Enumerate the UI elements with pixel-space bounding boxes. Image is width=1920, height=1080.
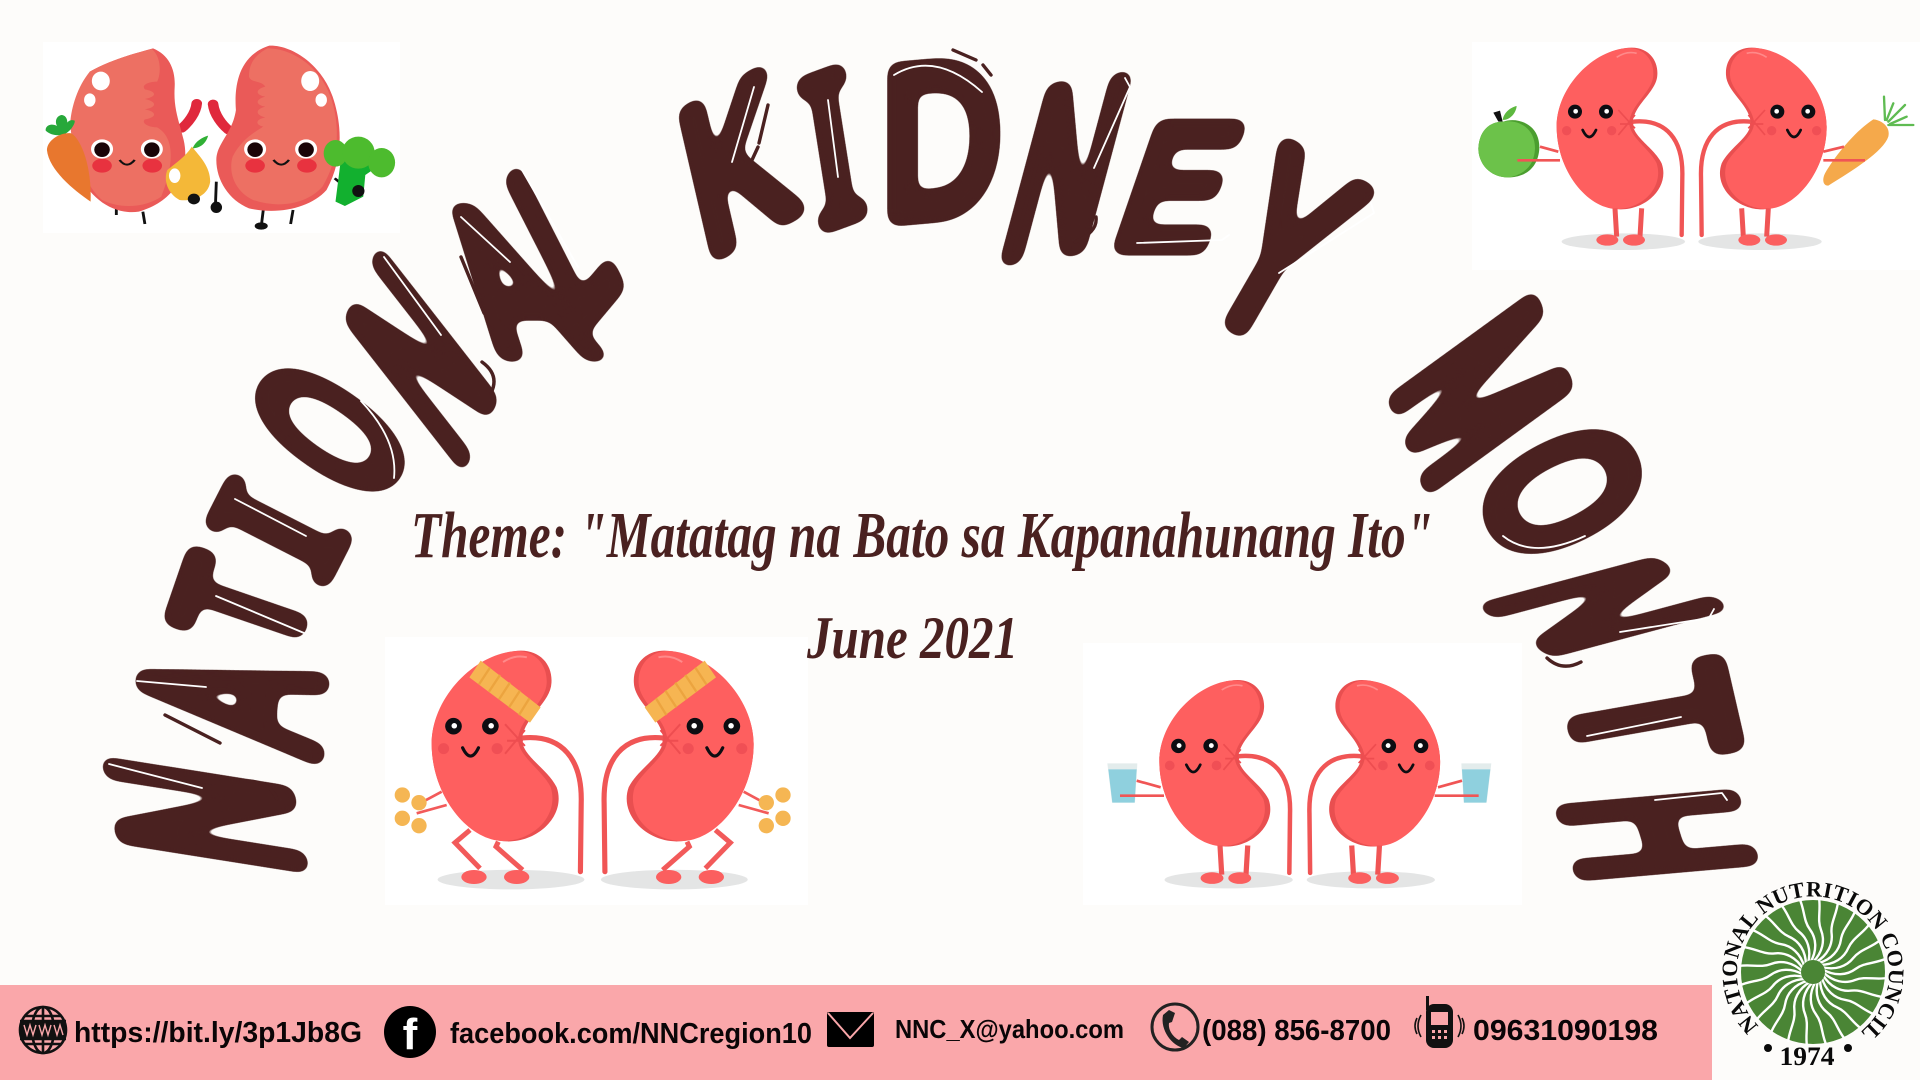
word: NATIONAL: T: [137, 538, 346, 674]
illustration: kidneys holding vegetables (top left): [43, 42, 400, 233]
word: KIDNEY: [664, 17, 1399, 399]
icon: telephone: [1152, 1004, 1198, 1050]
icon: facebook: [384, 1006, 436, 1059]
facebook address: facebook.com/NNCregion10: [450, 1018, 812, 1050]
email address: NNC_X@yahoo.com: [895, 1014, 1124, 1044]
word: NATIONAL: A: [391, 168, 626, 398]
icon: water glass (left): [1107, 763, 1164, 803]
icon: globe: [20, 1007, 66, 1053]
word: KIDNEY: Y: [1164, 96, 1399, 399]
logo: National Nutrition Council seal: 1974: [1780, 1042, 1834, 1071]
landline number: (088) 856-8700: [1202, 1015, 1391, 1047]
icon: carrot: [1823, 97, 1913, 186]
logo: National Nutrition Council seal: NATIONAL NUTRITION COUNCIL: [1722, 882, 1904, 1038]
website url: https://bit.ly/3p1Jb8G: [74, 1017, 362, 1049]
icon: apple: [1478, 106, 1560, 177]
word: MONTH: N: [1428, 542, 1780, 672]
title highlights and accent dashes: [109, 50, 1727, 800]
illustration: kidneys holding apple and carrot (top right): [1472, 42, 1920, 270]
word: KIDNEY: I: [790, 21, 874, 274]
word: KIDNEY: N: [982, 28, 1150, 310]
word: NATIONAL: I: [171, 455, 385, 604]
icon: water glass (right): [1435, 763, 1491, 803]
word: NATIONAL: N: [314, 204, 529, 515]
title: National Kidney Month arched lettering: [55, 17, 1804, 889]
word: KIDNEY: E: [1096, 91, 1260, 284]
icon: broccoli: [324, 137, 395, 206]
word: KIDNEY: D: [881, 17, 1001, 264]
icon: facebook: f: [403, 1010, 418, 1059]
word: MONTH: [1350, 259, 1804, 889]
word: NATIONAL: O: [209, 328, 451, 532]
title letters: [55, 17, 1804, 889]
footer contact bar: [0, 985, 1712, 1080]
theme line: Theme: "Matatag na Bato sa Kapanahunang Ito": [411, 499, 1433, 572]
icon: mobile phone: [1415, 996, 1464, 1048]
word: MONTH: T: [1520, 649, 1783, 783]
date line: June 2021: [806, 605, 1018, 671]
mobile number: 09631090198: [1473, 1015, 1658, 1047]
icon: carrot: [46, 115, 91, 202]
kidney with headband and dumbbell (left): [395, 651, 584, 889]
word: NATIONAL: N: [55, 744, 355, 886]
icon: pear: [166, 136, 210, 204]
word: NATIONAL: L: [482, 95, 644, 377]
icon: envelope: [827, 1012, 874, 1047]
word: MONTH: O: [1434, 392, 1690, 592]
word: NATIONAL: [55, 95, 644, 886]
word: MONTH: M: [1350, 259, 1612, 527]
word: MONTH: H: [1510, 781, 1804, 889]
word: NATIONAL: A: [90, 629, 373, 771]
kidney with headband and dumbbell (right): [601, 651, 791, 889]
word: KIDNEY: K: [664, 28, 810, 302]
illustration: kidneys holding water glasses (bottom right): [1083, 643, 1522, 905]
illustration: kidneys lifting dumbbells (bottom left): [385, 637, 808, 905]
